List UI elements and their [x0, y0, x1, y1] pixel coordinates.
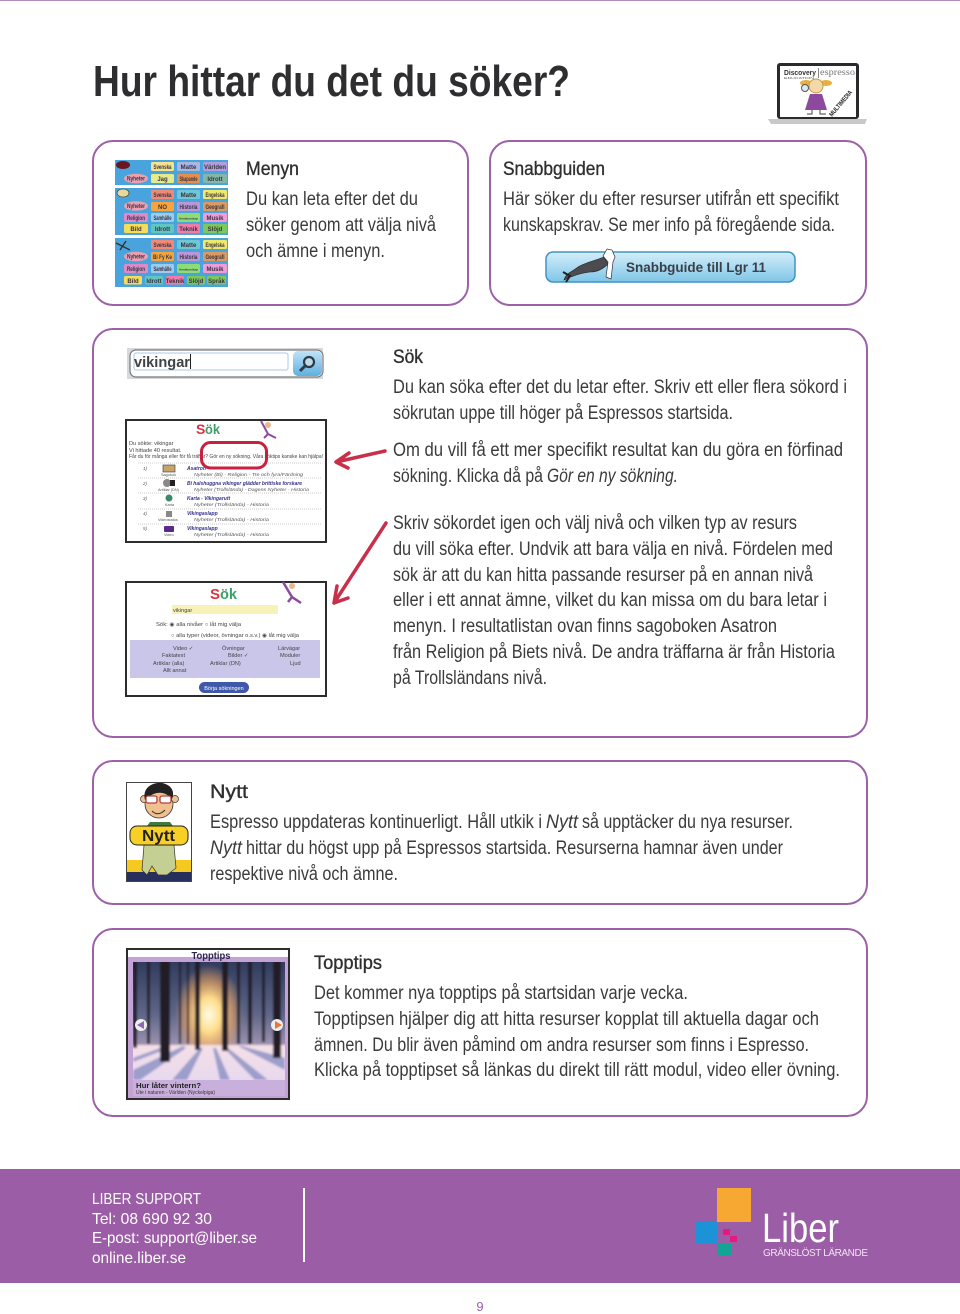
image: Topptips winter forest: Hur låter vintern?	[136, 1081, 201, 1090]
menu screenshot: Matte	[181, 243, 197, 249]
menu screenshot: Svenska	[154, 193, 172, 199]
page number: 9	[476, 1299, 484, 1314]
text: Menyn body: Du kan leta efter det du	[246, 189, 418, 210]
screenshot: refined search	[126, 582, 326, 696]
menu screenshot: Geografi	[206, 255, 225, 261]
text: refined search: Gör en ny sökning.	[547, 466, 678, 487]
text: support contact: E-post: support@liber.se	[92, 1230, 257, 1247]
title: Hur hittar du det du söker?	[93, 57, 570, 106]
screenshot: search results: Karta	[165, 503, 175, 507]
text: support contact: Tel: 08 690 92 30	[92, 1211, 212, 1228]
menu screenshot: Musik	[206, 216, 224, 222]
panel: Topptips	[93, 929, 867, 1116]
search box	[127, 348, 323, 379]
text: Menyn body	[246, 189, 436, 262]
menu screenshot: Matte	[181, 165, 197, 171]
text: Snabbguiden body: kunskapskrav. Se mer info på föregående sida.	[503, 215, 835, 236]
screenshot: search results: Får du för många eller för få träffar? Gör en ny sökning. Våra söktips kanske kan hjälpa!	[129, 453, 323, 460]
screenshot: refined search: Lärvägar	[278, 646, 300, 652]
text: support contact: LIBER SUPPORT	[92, 1191, 201, 1208]
screenshot: search results: Artiklar (DN)	[158, 488, 180, 492]
screenshot: refined search: Bilder ✓	[228, 653, 249, 659]
menu screenshot: Slöjd	[208, 227, 223, 233]
image: Topptips winter forest	[126, 948, 290, 1100]
menu screenshot: Jag	[157, 177, 168, 183]
screenshot: search results: Vi hittade 40 resultat.	[129, 448, 182, 454]
menu screenshot: Hemkunskap	[179, 268, 198, 272]
text: Topptips body: ämnen. Du blir även påmind om andra resurser som finns i Espresso.	[314, 1035, 809, 1056]
text: refined search: Om du vill få ett mer specifikt resultat kan du göra en förfinad	[393, 440, 843, 461]
screenshot: search results: Nyheter (Bi) - Religion - Tre och fyra/Färdning	[194, 472, 304, 477]
image: boy holding Nytt sign	[126, 782, 192, 882]
icon: Discovery Espresso laptop logo: Discovery	[784, 70, 816, 77]
menu screenshot: Idrott	[207, 177, 223, 183]
screenshot: search results: Vikingaslapp	[187, 511, 218, 517]
menu screenshot: Slöjd	[189, 279, 204, 285]
menu screenshot: Bild	[127, 279, 139, 285]
menu screenshot: Engelska	[206, 243, 225, 249]
screenshot: search results	[126, 420, 326, 542]
screenshot: search results: Sagobok	[161, 473, 176, 477]
heading: Menyn: Menyn	[246, 159, 299, 180]
screenshot: search results: Vikingaslapp	[187, 526, 218, 532]
icon: Discovery Espresso laptop logo: espresso	[820, 67, 856, 77]
text: Nytt body: hittar du högst upp på Espressos startsida. Resurserna hamnar även under	[246, 838, 784, 859]
menu screenshot: Idrott	[155, 227, 170, 233]
menu screenshot: Nyheter	[127, 254, 146, 260]
button: Snabbguide till Lgr 11: Snabbguide till Lgr 11	[626, 259, 766, 275]
screenshot: refined search: Börja sökningen	[204, 686, 244, 692]
screenshot: search results: Du sökte: vikingar	[129, 441, 174, 447]
text: Nytt body: Nytt	[546, 812, 579, 833]
menu screenshot: Världen	[204, 165, 226, 171]
menu screenshot: Samhälle	[154, 216, 172, 222]
search box: vikingar	[134, 354, 190, 371]
text: Nytt body: Espresso uppdateras kontinuerligt. Håll utkik i	[210, 812, 542, 833]
menu screenshot: Hemkunskap	[179, 216, 198, 220]
menu screenshot: Religion	[127, 267, 145, 273]
panel: Snabbguiden	[490, 141, 866, 305]
heading: Topptips: Topptips	[314, 953, 382, 974]
text: Snabbguiden body	[503, 189, 840, 236]
menu screenshot: Bild	[130, 227, 142, 233]
text: refined search: sökning. Klicka då på	[393, 466, 543, 487]
text: search advice: menyn. I resultatlistan ovan finns sagoboken Asatron	[393, 616, 777, 637]
button: Snabbguide till Lgr 11	[546, 249, 795, 282]
text: search intro: Du kan söka efter det du letar efter. Skriv ett eller flera sökord i	[393, 377, 847, 398]
text: Nytt body: så upptäcker du nya resurser.	[582, 812, 793, 833]
footer band	[0, 1169, 960, 1283]
menu screenshot: Teknik	[166, 279, 185, 285]
icon: Discovery Espresso laptop logo: EDUCATION	[784, 76, 814, 80]
screenshot: refined search: Artiklar (alla)	[153, 661, 185, 667]
image: boy holding Nytt sign: Nytt	[142, 828, 176, 845]
screenshot: search results: Karta - Vikingarutt	[187, 496, 230, 502]
menu screenshot: Nyheter	[127, 204, 146, 210]
logo: Liber: Liber	[762, 1205, 839, 1251]
menu screenshot: Samhälle	[154, 267, 172, 273]
text: search advice: sök är att du kan hitta passande resurser på en annan nivå	[393, 565, 813, 586]
arrow: to search result	[336, 451, 385, 468]
menu screenshot: Historia	[180, 205, 198, 211]
text: search advice: du vill söka efter. Undvik att bara välja en nivå. Fördelen med	[393, 539, 833, 560]
text: Nytt body: respektive nivå och ämne.	[210, 864, 398, 885]
menu screenshot: Teknik	[179, 227, 198, 233]
logo: Liber	[696, 1188, 868, 1259]
top edge line	[0, 0, 960, 1]
screenshot: search results: Nyheter (Trollslända) - Historia	[194, 532, 270, 537]
text: Snabbguiden body: Här söker du efter resurser utifrån ett specifikt	[503, 189, 840, 210]
heading: Sök: Sök	[393, 347, 423, 368]
icon: Discovery Espresso laptop logo	[768, 63, 867, 124]
menu screenshot: Engelska	[206, 193, 225, 199]
screenshot: refined search: ○ alla typer (videor, övningar o.s.v.) ◉ låt mig välja	[171, 632, 300, 639]
text: search advice: från Religion på Biets nivå. De andra träffarna är från Historia	[393, 642, 835, 663]
arrow: to refined search	[334, 523, 386, 603]
text: search intro: sökrutan uppe till höger på Espressos startsida.	[393, 403, 733, 424]
menu screenshot: Skapande	[180, 177, 198, 183]
menu screenshot: Matte	[181, 193, 197, 199]
screenshot: refined search: vikingar	[173, 608, 192, 614]
screenshot: search results: 2)	[142, 481, 147, 486]
menu screenshot: Nyheter	[127, 176, 146, 182]
text: support contact	[92, 1191, 257, 1267]
screenshot: refined search: Ljud	[290, 661, 301, 667]
screenshot: refined search: S	[210, 586, 220, 603]
menu screenshot: NO	[158, 205, 167, 211]
screenshot: search results: ök	[205, 421, 220, 437]
text: Nytt body	[210, 812, 793, 885]
text: Topptips body	[314, 983, 840, 1081]
screenshot: search results: Asatron	[186, 466, 206, 472]
heading: Nytt: Nytt	[210, 782, 249, 803]
screenshot: refined search: Allt annat	[163, 668, 187, 674]
icon: Discovery Espresso laptop logo: MULTIMEDIA	[828, 89, 854, 118]
text: Topptips body: Topptipsen hjälper dig att hitta resurser kopplat till aktuella dagar och	[314, 1009, 819, 1030]
menu screenshot: Geografi	[206, 205, 225, 211]
text: Topptips body: Klicka på topptipset så länkas du direkt till rätt modul, video eller övning.	[314, 1060, 840, 1081]
text: Topptips body: Det kommer nya topptips på startsidan varje vecka.	[314, 983, 688, 1004]
text: search advice: Skriv sökordet igen och välj nivå och vilken typ av resurs	[393, 513, 797, 534]
menu screenshot: Svenska	[154, 243, 172, 249]
image: Topptips winter forest: Ute i naturen - Världen (Nyckelpiga)	[136, 1090, 215, 1096]
screenshot: search results: Bi halshuggna vikinger glädder brittiske forskare	[187, 481, 302, 487]
menu screenshot: Religion	[127, 216, 145, 222]
text: search advice: eller i ett annat ämne, vilket du kan missa om du bara letar i	[393, 590, 827, 611]
screenshot: refined search: Artiklar (DN)	[210, 661, 241, 667]
screenshot: refined search: Övningar	[222, 645, 245, 652]
screenshot: search results: 5)	[143, 526, 147, 531]
panel: Nytt	[93, 761, 867, 904]
screenshot: refined search: ök	[220, 586, 238, 603]
menu screenshot: Musik	[206, 267, 224, 273]
screenshot: search results: S	[196, 421, 205, 437]
image: Topptips winter forest: Topptips	[192, 951, 231, 962]
screenshot: refined search: Video ✓	[173, 646, 193, 652]
menu screenshot: Historia	[180, 255, 198, 261]
panel: Sök	[93, 329, 867, 737]
text: Nytt body: Nytt	[210, 838, 243, 859]
menu screenshot	[115, 160, 228, 287]
text: search advice	[393, 513, 835, 689]
text: Menyn body: söker genom att välja nivå	[246, 215, 436, 236]
screenshot: search results: Nyheter (Trollslända) - Dagens Nyheter - Historia	[194, 487, 310, 492]
screenshot: search results: Nyheter (Trollslända) - Historia	[194, 517, 270, 522]
screenshot: search results: Nyheter (Trollslända) - Historia	[194, 502, 270, 507]
logo: Liber: GRÄNSLÖST LÄRANDE	[763, 1247, 868, 1259]
text: support contact: online.liber.se	[92, 1250, 186, 1267]
screenshot: refined search: Faktatext	[162, 653, 185, 659]
text: refined search	[393, 440, 843, 487]
screenshot: search results: Video	[164, 533, 174, 537]
screenshot: refined search: Moduler	[280, 653, 300, 659]
text: Menyn body: och ämne i menyn.	[246, 241, 385, 262]
screenshot: search results: 1)	[143, 466, 147, 471]
heading: Snabbguiden: Snabbguiden	[503, 159, 605, 180]
menu screenshot: Bi Fy Ke	[153, 255, 173, 261]
menu screenshot: Språk	[208, 278, 225, 285]
panel: Menyn	[93, 141, 468, 305]
callout: red highlight ring	[202, 442, 266, 468]
screenshot: refined search: Sök: ◉ alla nivåer ○ låt mig välja	[156, 621, 242, 628]
menu screenshot: Svenska	[154, 165, 172, 171]
text: search intro	[393, 377, 847, 424]
menu screenshot: Idrott	[146, 279, 162, 285]
screenshot: search results: 4)	[143, 511, 147, 516]
screenshot: search results: Videostatus	[158, 518, 178, 522]
text: search advice: på Trollsländans nivå.	[393, 668, 547, 689]
screenshot: search results: 3)	[143, 496, 147, 501]
